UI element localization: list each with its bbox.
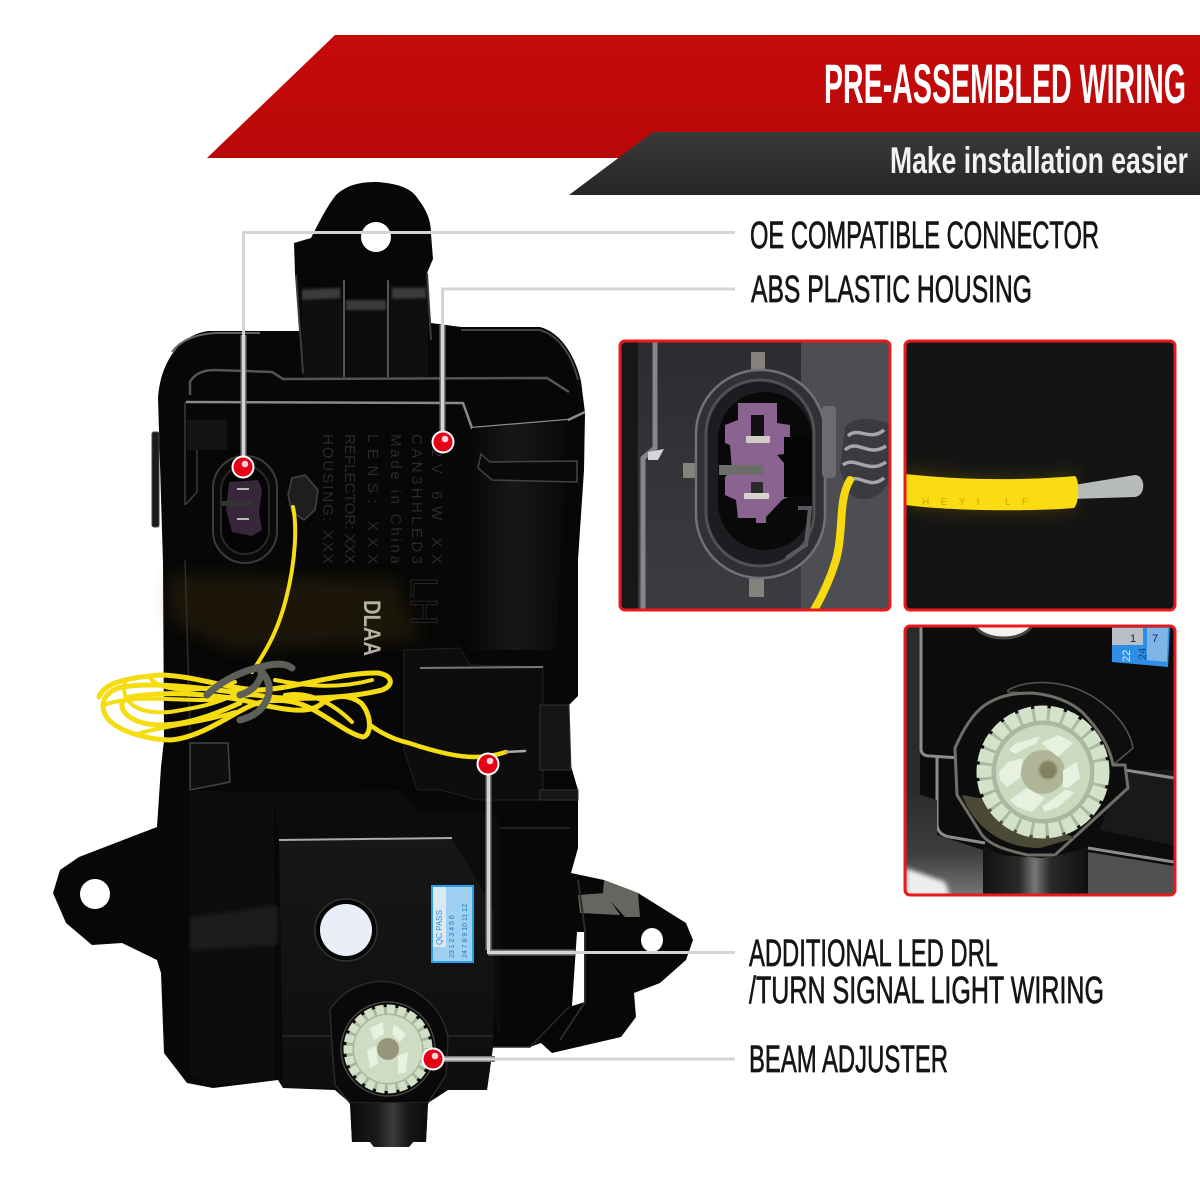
wire glow	[905, 468, 1075, 514]
amber reflection	[170, 575, 420, 650]
upper terminal	[746, 415, 770, 443]
mounting hole: left ear	[80, 879, 110, 909]
left ridge	[643, 340, 655, 611]
label: LED DRL wiring: ADDITIONAL LED DRL	[749, 933, 998, 975]
beam adjuster gear	[330, 981, 448, 1103]
mounting hole: right ear	[641, 928, 663, 952]
gear housing ring	[955, 693, 1128, 855]
gear housing arc	[1008, 683, 1133, 765]
housing silhouette	[53, 182, 693, 1147]
callout lines	[244, 232, 735, 1059]
panel: connector close-up	[619, 340, 891, 612]
left side tabs	[152, 432, 159, 527]
right body seam	[493, 828, 570, 1047]
front box bevel	[274, 790, 500, 1040]
moulded text	[319, 434, 445, 565]
left blur strip	[906, 628, 920, 794]
top tab ribs	[296, 273, 431, 377]
panel: wire tip close-up	[904, 340, 1176, 611]
upper rim highlights	[172, 330, 585, 730]
mounting hole: top	[361, 222, 391, 252]
panel: beam adjuster close-up	[904, 625, 1176, 896]
grey clip on right ear	[578, 880, 640, 917]
wire print: HEYI LF	[922, 497, 1028, 508]
right ear clip detail	[560, 880, 585, 1040]
body highlight	[190, 905, 278, 950]
side post	[822, 406, 836, 478]
lower right grey	[1088, 852, 1174, 896]
block highlight	[420, 667, 543, 668]
panel border	[620, 341, 890, 610]
gear centre	[1039, 761, 1057, 779]
yellow wire with loops	[99, 507, 525, 757]
fog light housing product illustration	[53, 182, 735, 1147]
wire grommet	[288, 475, 318, 520]
purple terminal block	[725, 403, 790, 523]
blue label: 1	[1130, 633, 1136, 645]
seal highlights	[843, 430, 886, 483]
right black cavity	[784, 437, 790, 497]
lower body panel	[190, 790, 274, 1085]
bottom left grey	[906, 790, 983, 896]
lower stepped block	[404, 648, 543, 800]
olive cavity	[962, 795, 1075, 848]
panel border	[905, 626, 1175, 895]
marker dots	[232, 430, 500, 1070]
gear teeth base	[979, 708, 1107, 836]
adjuster post	[350, 1103, 428, 1147]
marker: wiring	[476, 752, 500, 776]
moulded text: REFLECTOR: XXX	[341, 434, 358, 564]
front box bottom seam	[282, 1035, 493, 1037]
lock bar	[719, 465, 764, 475]
LH mark: LH	[402, 577, 444, 626]
white gap in right clip	[572, 932, 585, 1006]
blue label: 7	[1152, 633, 1158, 645]
front box	[279, 838, 494, 1090]
label: ABS plastic housing: ABS PLASTIC HOUSING	[751, 269, 1032, 311]
header banner	[207, 35, 1200, 195]
connector recess	[187, 420, 227, 450]
lower terminal	[744, 482, 769, 499]
stripped strands	[1078, 475, 1144, 499]
moulded text: LENS: XXX	[364, 434, 381, 564]
gear blades	[999, 735, 1080, 812]
moulded text: CAN3HHLED3	[408, 434, 425, 564]
bottom left highlight	[906, 868, 950, 896]
left bracket	[190, 743, 230, 790]
raised column	[460, 420, 568, 650]
QC label: 24 7 8 9 10 11 12	[462, 904, 469, 958]
connector outer ring	[696, 370, 825, 578]
marker: connector	[232, 456, 254, 478]
left moulded strip	[622, 342, 638, 608]
right side notches	[540, 705, 578, 800]
gear teeth	[984, 713, 1102, 831]
front box edge highlight	[279, 838, 452, 840]
QC label: 23 1 2 3 4 5 6	[449, 915, 456, 958]
blue label: 22	[1121, 650, 1133, 662]
blue label: 24	[1137, 648, 1149, 660]
connector middle ring	[706, 380, 814, 566]
QC label	[431, 885, 474, 963]
label: LED DRL wiring	[749, 933, 1104, 1012]
right lip	[786, 508, 810, 558]
ridge notch	[648, 449, 664, 460]
white vent	[975, 626, 1032, 638]
marker: housing	[432, 430, 454, 454]
gear hub	[1021, 750, 1065, 794]
mould tabs	[683, 352, 765, 597]
zip tie	[207, 664, 292, 720]
white vent circle	[315, 899, 377, 961]
label: beam adjuster: BEAM ADJUSTER	[749, 1039, 948, 1081]
moulded text: Made in China	[387, 434, 404, 565]
moulded text: 12V 6W XX	[428, 434, 445, 564]
panel background right	[801, 340, 891, 611]
black plate	[920, 626, 1176, 896]
banner: dark sub-strip	[569, 132, 1200, 195]
marker: beam adjuster	[422, 1048, 444, 1070]
gear disc	[996, 725, 1090, 819]
moulded text: HOUSING: XXX	[319, 434, 336, 564]
twisted wire seal	[840, 419, 890, 499]
connector on housing	[213, 456, 277, 563]
panel border	[905, 341, 1175, 610]
blue label	[1112, 626, 1170, 667]
bulb clip	[478, 454, 577, 482]
DLAA mark: DLAA	[358, 600, 385, 656]
connector cavity	[718, 392, 812, 550]
yellow wire	[813, 480, 850, 612]
plate outline	[921, 626, 1174, 862]
QC label: QC PASS	[435, 910, 444, 945]
yellow insulation	[905, 474, 1078, 510]
banner: red background	[207, 35, 1200, 158]
adjuster post	[983, 845, 1087, 896]
